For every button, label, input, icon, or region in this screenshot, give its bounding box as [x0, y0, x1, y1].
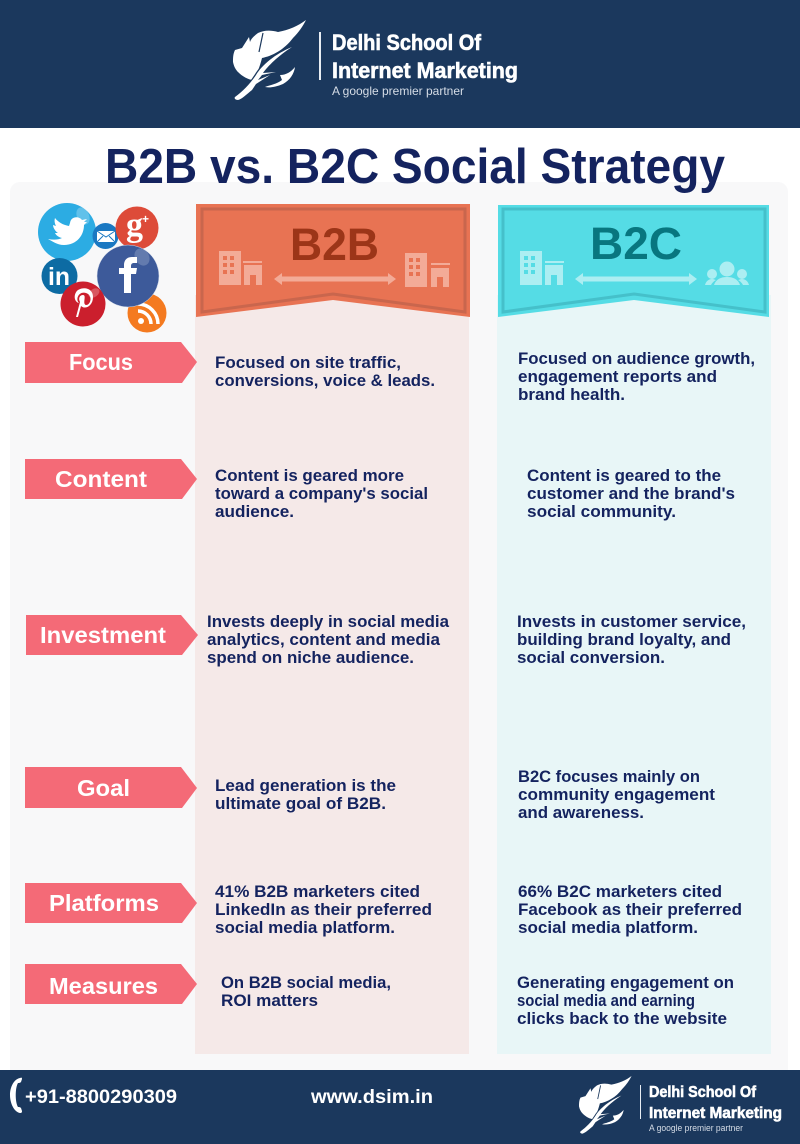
icon: google plus: g [126, 207, 143, 244]
text: B2B platforms: social media platform. [215, 918, 395, 937]
icon: rss [128, 294, 166, 332]
footer logo text: Delhi School Of [649, 1084, 757, 1101]
icon: facebook [97, 245, 159, 307]
text: B2C platforms [518, 882, 742, 937]
text: B2C focus [518, 349, 755, 404]
text: B2C investment: social conversion. [517, 648, 665, 667]
text: B2B investment: Invests deeply in social media [207, 612, 450, 631]
text: B2B investment: analytics, content and media [207, 630, 441, 649]
footer logo text: Internet Marketing [649, 1105, 782, 1122]
panel: B2B column [195, 295, 469, 1054]
label: Measures [25, 964, 197, 1004]
text: B2C content: Content is geared to the [527, 466, 721, 485]
text: B2C investment [517, 612, 746, 667]
icon: people [705, 262, 749, 285]
icon: phone [10, 1078, 22, 1113]
label: Investment [26, 615, 198, 655]
label: Goal [25, 767, 197, 808]
banner: B2C [498, 205, 769, 317]
text: B2C goal: community engagement [518, 785, 715, 804]
text: B2B investment: spend on niche audience. [207, 648, 414, 667]
icon: footer leaf logo [579, 1076, 632, 1134]
icon: building [520, 251, 564, 285]
text: B2B measures: ROI matters [221, 991, 318, 1010]
icon: social media cluster [38, 203, 166, 332]
text: B2B measures [221, 973, 391, 1010]
label: Content: Content [55, 466, 147, 492]
logo text: Internet Marketing [332, 58, 518, 83]
logo text: Delhi School Of [332, 30, 482, 55]
footer logo text: A google premier partner [649, 1123, 743, 1133]
text: B2B platforms [215, 882, 432, 937]
text: B2C goal [518, 767, 715, 822]
text: B2B investment [207, 612, 450, 667]
text: B2B focus: Focused on site traffic, [215, 353, 401, 372]
label: Goal: Goal [77, 775, 130, 801]
text: B2C focus: Focused on audience growth, [518, 349, 755, 368]
label: Platforms [25, 883, 197, 923]
footer phone number: +91-8800290309 [25, 1087, 177, 1108]
icon: leaf logo [233, 20, 306, 100]
label: Investment: Investment [40, 622, 166, 648]
label: Content [25, 459, 197, 499]
icon: building right [405, 253, 450, 287]
text: B2C goal: and awareness. [518, 803, 644, 822]
text: B2B content: Content is geared more [215, 466, 404, 485]
footer website: www.dsim.in [310, 1087, 433, 1108]
label: Focus [25, 342, 197, 383]
panel: page background [10, 182, 788, 1082]
text: B2C platforms: social media platform. [518, 918, 698, 937]
icon: linkedin: in [48, 263, 70, 291]
label: Measures: Measures [49, 973, 158, 999]
text: B2B content: audience. [215, 502, 294, 521]
text: B2C measures [517, 973, 734, 1028]
banner: B2C: B2C [590, 218, 682, 269]
text: B2C platforms: 66% B2C marketers cited [518, 882, 722, 901]
text: B2C measures: clicks back to the website [517, 1009, 727, 1028]
text: B2C content: customer and the brand's [527, 484, 735, 503]
logo text [332, 30, 518, 98]
logo text: A google premier partner [332, 84, 464, 98]
icon: double arrow [575, 273, 697, 285]
header band [0, 0, 800, 128]
text: B2B focus [215, 353, 435, 390]
text: B2C investment: Invests in customer service, [517, 612, 746, 631]
label: Platforms: Platforms [49, 890, 159, 916]
text: B2C investment: building brand loyalty, and [517, 630, 731, 649]
text: B2B content [215, 466, 428, 521]
text: B2C measures: social media and earning [517, 991, 695, 1010]
text: B2C platforms: Facebook as their preferred [518, 900, 742, 919]
text: B2C focus: brand health. [518, 385, 625, 404]
text: B2C content: social community. [527, 502, 676, 521]
text: B2C content [527, 466, 735, 521]
icon: double arrow [274, 273, 396, 285]
icon: building left [219, 251, 262, 285]
text: B2B measures: On B2B social media, [221, 973, 391, 992]
text: B2B goal: ultimate goal of B2B. [215, 794, 386, 813]
text: B2B content: toward a company's social [215, 484, 428, 503]
banner: B2B: B2B [290, 219, 379, 270]
panel: B2C column [497, 295, 771, 1054]
text: B2C measures: Generating engagement on [517, 973, 734, 992]
text: B2C focus: engagement reports and [518, 367, 717, 386]
text: B2B platforms: LinkedIn as their preferred [215, 900, 432, 919]
text: B2C goal: B2C focuses mainly on [518, 767, 700, 786]
text: B2B focus: conversions, voice & leads. [215, 371, 435, 390]
text: B2B platforms: 41% B2B marketers cited [215, 882, 420, 901]
icon: pinterest [60, 282, 106, 326]
icon: google plus: + [142, 212, 149, 226]
footer logo text [649, 1084, 782, 1133]
icon: twitter [38, 203, 96, 261]
title: B2B vs. B2C Social Strategy [105, 140, 725, 194]
text: B2B goal: Lead generation is the [215, 776, 396, 795]
banner: B2B [196, 204, 470, 317]
icon: google plus [116, 206, 158, 250]
icon: mail [92, 223, 118, 249]
text: B2B goal [215, 776, 396, 813]
label: Focus: Focus [69, 349, 133, 375]
footer band [0, 1070, 800, 1144]
